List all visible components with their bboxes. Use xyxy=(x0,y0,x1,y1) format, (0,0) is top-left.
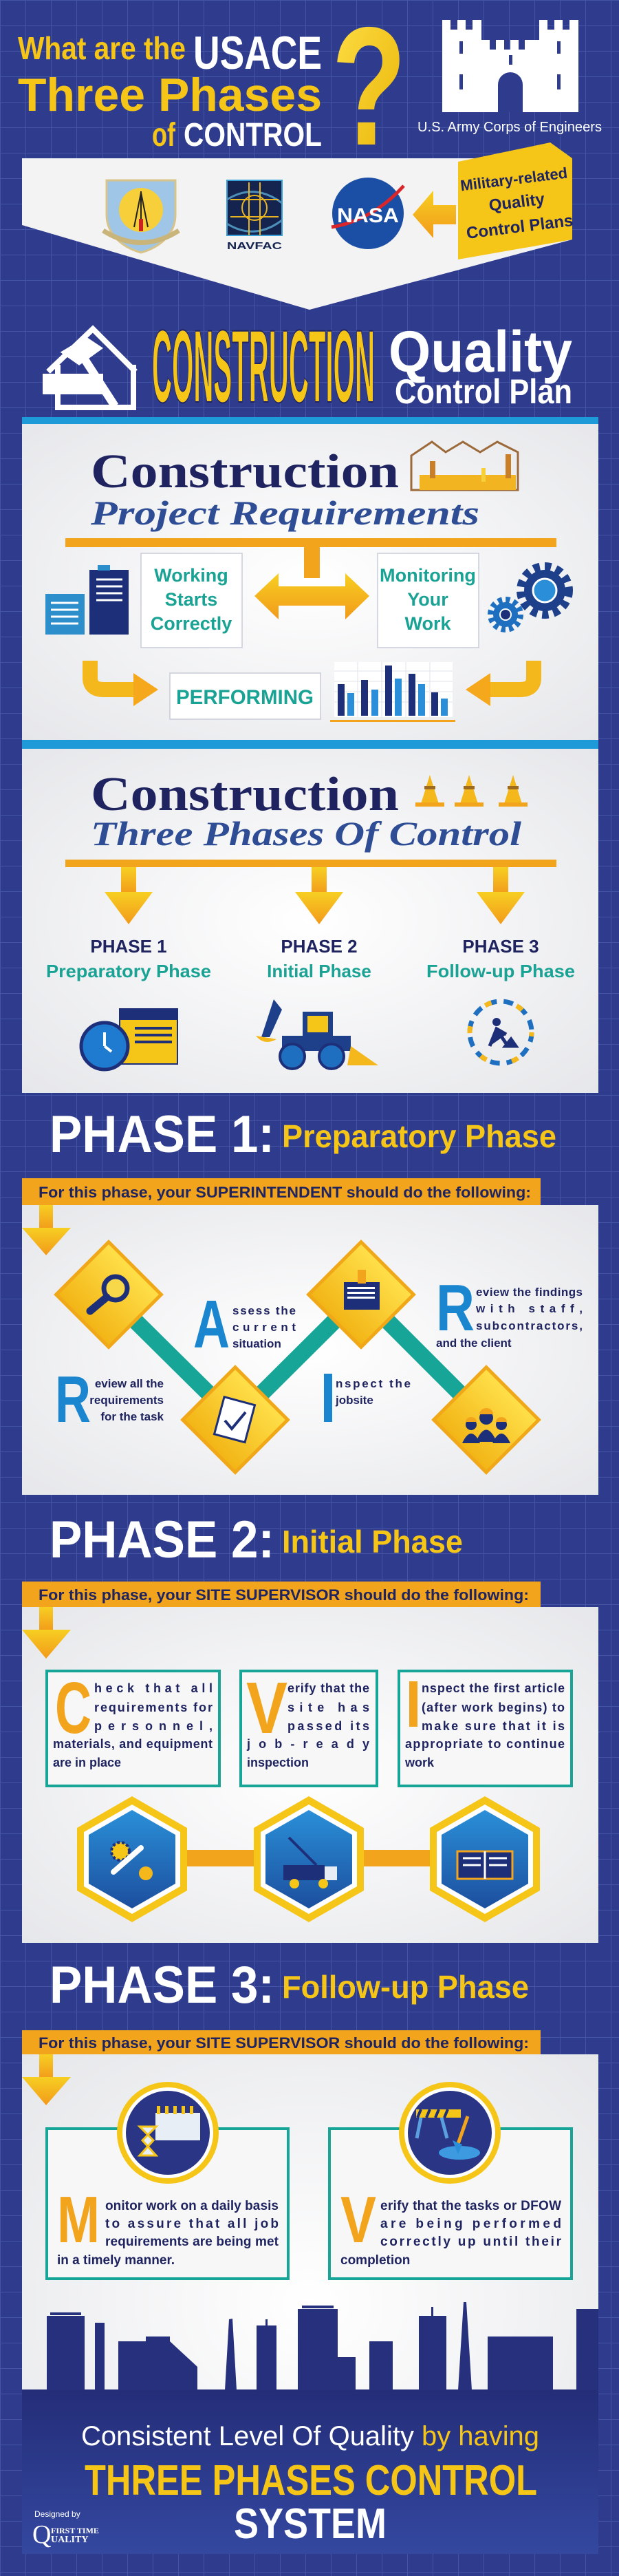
text: Assess the current situation: A xyxy=(193,1286,230,1362)
icon: barrier shovel xyxy=(399,2082,501,2184)
box: Verify tasks: completion xyxy=(340,2253,410,2268)
box: Verify: erify that the xyxy=(287,1681,369,1695)
tab: site supervisor xyxy=(22,2030,541,2054)
logo: designed by First Time Quality: Q xyxy=(32,2520,51,2549)
closing statement: SYSTEM xyxy=(234,2500,387,2548)
heading: PHASE 2 Initial Phase: PHASE 2: xyxy=(50,1511,274,1569)
box: Working Starts Correctly: Correctly xyxy=(151,613,232,634)
icon: hex crane truck xyxy=(254,1796,364,1922)
text: Inspect the jobsite: nspect the xyxy=(336,1377,411,1390)
heading: CONSTRUCTION Quality Control Plan: Quality xyxy=(389,319,572,384)
heading: PHASE 1 Preparatory Phase: Preparatory Phase xyxy=(282,1118,556,1154)
logo: NASA xyxy=(332,178,404,249)
title: USACE xyxy=(193,27,322,79)
icon: hourglass calendar xyxy=(117,2082,219,2184)
text: Review the findings xyxy=(436,1271,583,1350)
box: Check: requirements for xyxy=(94,1701,213,1714)
text: Inspect the jobsite xyxy=(324,1374,411,1422)
box: Inspect: appropriate to continue xyxy=(405,1737,565,1751)
logo: NAVFAC xyxy=(227,180,282,252)
heading: Construction Project Requirements: Construction xyxy=(91,445,399,498)
box: Monitoring Your Work: Work xyxy=(404,613,451,634)
icon: diamond magnifier xyxy=(56,1242,161,1347)
heading: PHASE 2 Initial Phase xyxy=(50,1511,463,1569)
box: Monitor: M xyxy=(57,2183,100,2257)
box: Monitor: in a timely manner. xyxy=(57,2253,175,2268)
text: U.S. Army Corps of Engineers: U.S. Army Corps of Engineers xyxy=(417,120,602,135)
box: Working Starts Correctly xyxy=(141,553,242,648)
title: of xyxy=(152,117,176,153)
phase labels: PHASE 3 xyxy=(462,936,539,957)
text: Assess the current situation: current xyxy=(232,1321,296,1334)
box: PERFORMING xyxy=(170,673,321,719)
box: Check xyxy=(47,1668,219,1786)
callout: Military-related Quality Control Plans xyxy=(458,142,574,259)
heading: CONSTRUCTION Quality Control Plan: Control Plan xyxy=(395,372,572,411)
box: Verify tasks: erify that the tasks or DFOW xyxy=(380,2199,561,2213)
logo: designed by First Time Quality: FIRST TIME xyxy=(51,2526,99,2535)
box: Check: materials, and equipment xyxy=(53,1737,213,1751)
box: Working Starts Correctly: Working xyxy=(154,565,228,586)
icon: follow-up cycle xyxy=(470,1001,532,1063)
icon: hex book xyxy=(430,1796,540,1922)
panel: phase 1 steps xyxy=(22,1205,598,1495)
tab: superintendent: For this phase, your SUPERINTENDENT should do the following: xyxy=(39,1184,531,1201)
text: Assess the current situation: ssess the xyxy=(232,1304,296,1317)
connector zigzag xyxy=(109,1295,486,1420)
title: CONTROL xyxy=(184,117,322,153)
box: Verify tasks: V xyxy=(340,2183,376,2257)
text: Review the findings: subcontractors, xyxy=(476,1319,583,1332)
closing statement xyxy=(81,2421,539,2548)
panel: project requirements xyxy=(22,417,598,740)
box: PERFORMING: PERFORMING xyxy=(176,686,314,709)
logo: designed by First Time Quality xyxy=(32,2509,99,2549)
box: Check: heck that all xyxy=(94,1681,213,1695)
heading: Construction Three Phases Of Control: Three Phases Of Control xyxy=(91,814,521,853)
logo: designed by First Time Quality: UALITY xyxy=(51,2535,88,2545)
arrow: down small xyxy=(22,1607,71,1659)
callout: Military-related Quality Control Plans: Quality xyxy=(488,190,546,215)
text: Review all the requirements xyxy=(55,1363,164,1436)
arrow: curved left xyxy=(90,661,158,706)
logo: NAVFAC: NAVFAC xyxy=(227,240,282,252)
box: Verify: passed its xyxy=(287,1719,369,1733)
arrows: down xyxy=(105,867,525,924)
icon: construction house xyxy=(45,329,135,407)
panel: phase 2 steps xyxy=(22,1607,598,1943)
connector bar xyxy=(65,860,556,867)
box: Check: C xyxy=(55,1668,91,1749)
heading: Construction Project Requirements xyxy=(90,445,479,532)
box: Verify: site has xyxy=(287,1701,369,1714)
skyline xyxy=(22,2302,598,2554)
text: Review the findings: and the client xyxy=(436,1337,512,1350)
text: Review the findings: eview the findings xyxy=(476,1286,583,1299)
box: Inspect xyxy=(399,1671,572,1786)
text: Assess the current situation xyxy=(193,1286,296,1362)
callout: Military-related Quality Control Plans: Control Plans xyxy=(466,211,574,243)
text: Assess the current situation: situation xyxy=(232,1337,281,1350)
title: Three Phases xyxy=(18,69,322,121)
icon: loader vehicle xyxy=(256,999,378,1069)
heading: PHASE 3 Follow-up Phase: Follow-up Phase xyxy=(282,1969,529,2005)
box: Verify: job-ready xyxy=(246,1737,369,1751)
box: Inspect: work xyxy=(404,1756,435,1769)
heading: Construction Three Phases Of Control xyxy=(91,768,521,853)
logo: NASA: NASA xyxy=(337,204,399,227)
box: Monitor: onitor work on a daily basis xyxy=(105,2199,279,2213)
icon: diamond team xyxy=(434,1367,539,1472)
text: Review all the requirements: for the task xyxy=(100,1410,164,1423)
arrow: down small xyxy=(22,1205,71,1255)
icon: hex tools xyxy=(77,1796,187,1922)
heading: Construction Project Requirements: Project Requirements xyxy=(90,493,479,532)
tab: site supervisor xyxy=(22,1582,541,1607)
box: Inspect: (after work begins) to xyxy=(422,1701,565,1714)
tab: site supervisor: For this phase, your SITE SUPERVISOR should do the following: xyxy=(39,2034,529,2052)
closing statement: Consistent Level Of Quality by having xyxy=(81,2421,539,2451)
title xyxy=(18,27,322,153)
icon: diamond factory xyxy=(309,1242,413,1347)
icon: calendar and clock xyxy=(81,1009,177,1069)
box: Monitoring Your Work: Monitoring xyxy=(380,565,476,586)
box: Monitoring Your Work: Your xyxy=(407,589,448,610)
heading: PHASE 2 Initial Phase: Initial Phase xyxy=(282,1524,463,1560)
box: Monitor: to assure that all job xyxy=(105,2217,279,2231)
box: Inspect: make sure that it is xyxy=(422,1719,565,1733)
heading: PHASE 1 Preparatory Phase xyxy=(50,1105,556,1164)
panel: three phases of control xyxy=(22,740,598,1093)
text: Review the findings: with staff, xyxy=(475,1302,583,1315)
box: Verify tasks: correctly up until their xyxy=(380,2235,562,2249)
phase labels: PHASE 2 xyxy=(281,936,358,957)
phase labels: Preparatory Phase xyxy=(46,961,211,981)
phase labels: Follow-up Phase xyxy=(426,961,575,981)
arrow: left pointing xyxy=(413,191,456,238)
bar chart xyxy=(330,662,455,722)
box: Monitor: requirements are being met xyxy=(105,2235,279,2249)
box: Check: are in place xyxy=(53,1756,121,1769)
heading: PHASE 3 Follow-up Phase: PHASE 3: xyxy=(50,1956,274,2014)
tab: superintendent xyxy=(22,1178,541,1205)
box: Verify: V xyxy=(246,1668,287,1749)
box: Monitor xyxy=(47,2082,288,2279)
heading: PHASE 1 Preparatory Phase: PHASE 1: xyxy=(50,1105,274,1164)
icon: factory xyxy=(411,442,518,490)
box: Verify tasks: are being performed xyxy=(380,2217,561,2231)
box: Verify xyxy=(241,1668,377,1786)
connector bar xyxy=(65,538,556,578)
banner: logos xyxy=(22,158,572,310)
arrow: curved right xyxy=(466,661,534,706)
connector bar xyxy=(132,1850,485,1866)
logo: designed by First Time Quality: Designed by xyxy=(34,2509,80,2519)
text: Review all the requirements: eview all the xyxy=(95,1377,164,1390)
icon: documents xyxy=(45,565,129,635)
text: Review all the requirements: requirements xyxy=(89,1394,164,1407)
text: Inspect the jobsite: jobsite xyxy=(335,1394,373,1407)
arrow: double xyxy=(254,573,369,619)
phase labels: Initial Phase xyxy=(267,961,371,981)
panel: phase 3 xyxy=(22,2054,598,2554)
icon: gears xyxy=(491,567,568,629)
heading: PHASE 3 Follow-up Phase xyxy=(50,1956,529,2014)
box: Verify: inspection xyxy=(247,1756,309,1769)
callout: Military-related Quality Control Plans: Military-related xyxy=(459,164,568,194)
logo: air force xyxy=(103,180,179,253)
title: What are the xyxy=(18,30,186,66)
box: Verify tasks xyxy=(329,2082,572,2279)
tab: site supervisor: For this phase, your SITE SUPERVISOR should do the following: xyxy=(39,1586,529,1604)
phase labels xyxy=(46,936,575,981)
icon: diamond clipboard xyxy=(183,1367,287,1472)
icon: castle logo xyxy=(442,20,578,112)
arrow: down small xyxy=(22,2054,71,2105)
box: Inspect: nspect the first article xyxy=(422,1681,565,1695)
heading: Construction Three Phases Of Control: Construction xyxy=(91,768,399,821)
box: Monitoring Your Work xyxy=(378,553,479,648)
icon: cones xyxy=(415,775,528,807)
phase labels: PHASE 1 xyxy=(90,936,167,957)
text: Review all the requirements: R xyxy=(55,1363,91,1436)
box: Working Starts Correctly: Starts xyxy=(165,589,217,610)
box: Check: personnel, xyxy=(94,1719,213,1733)
text: Review the findings: R xyxy=(436,1271,475,1345)
